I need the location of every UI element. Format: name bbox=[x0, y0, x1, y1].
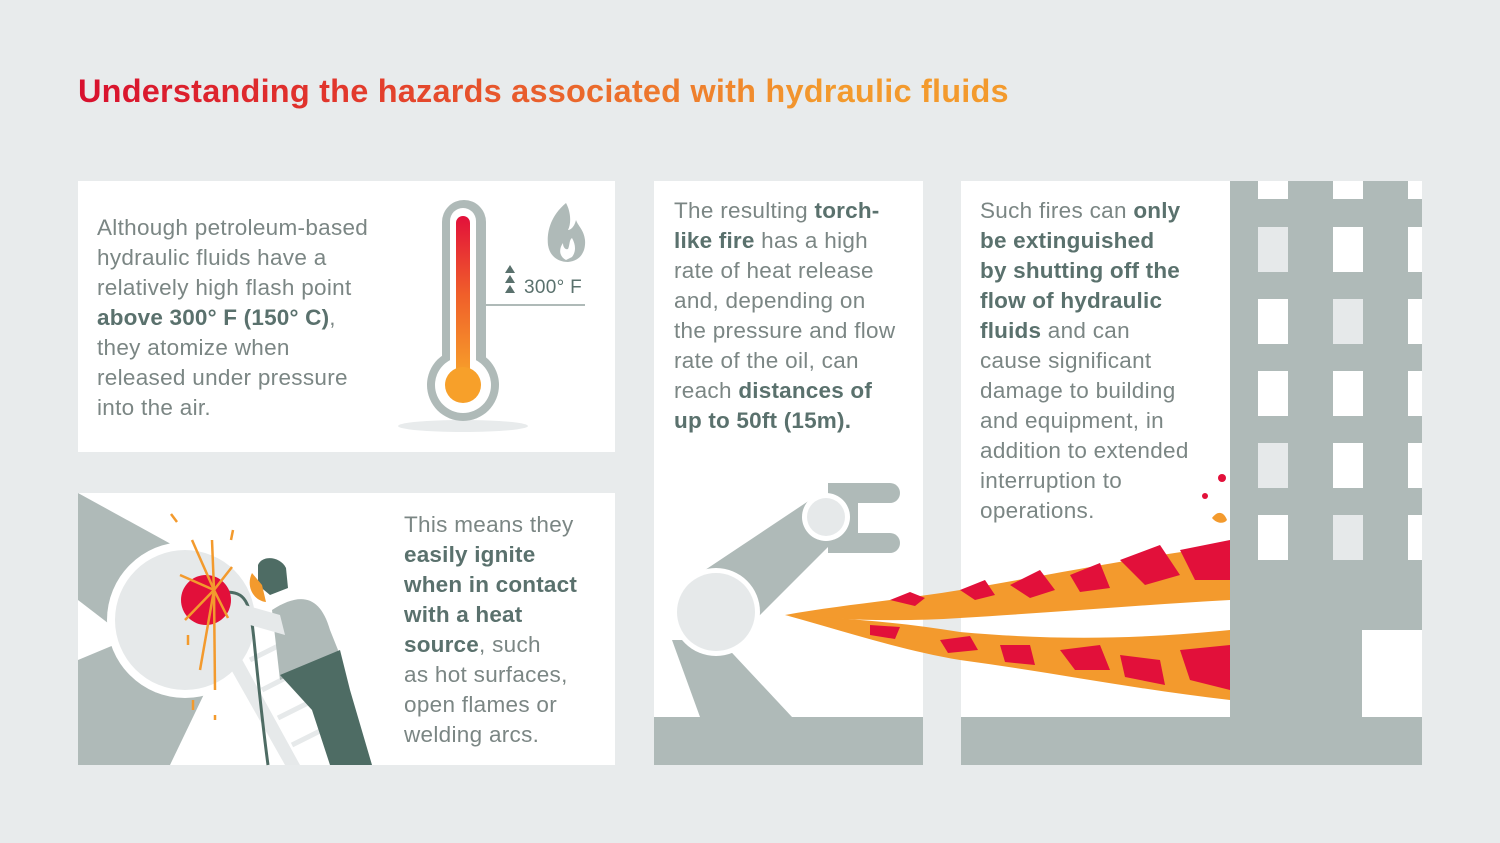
text: flash point: into the air. bbox=[97, 395, 211, 420]
text: ignite: This means they bbox=[404, 512, 574, 537]
text: extinguish: by shutting off the bbox=[980, 258, 1180, 283]
text: ignite: welding arcs. bbox=[404, 722, 539, 747]
panel: torch fire bbox=[654, 181, 923, 765]
text: extinguish: operations. bbox=[980, 498, 1095, 523]
text: ignite: as hot surfaces, bbox=[404, 662, 568, 687]
text: flash point: hydraulic fluids have a bbox=[97, 245, 327, 270]
text: ignite: easily ignite bbox=[404, 542, 535, 567]
text: torch fire: rate of heat release bbox=[674, 258, 874, 283]
text: torch fire: rate of the oil, can bbox=[674, 348, 859, 373]
text: torch fire bbox=[674, 198, 896, 433]
illustration: welder bbox=[78, 493, 372, 765]
icon: up arrows bbox=[505, 265, 515, 293]
text: torch fire: and, depending on bbox=[674, 288, 866, 313]
label: 300° F: 300° F bbox=[524, 277, 582, 298]
text: flash point: above 300° F (150° C), bbox=[97, 305, 336, 330]
text: extinguish bbox=[980, 198, 1189, 523]
title: Understanding the hazards associated with hydraulic fluids bbox=[78, 73, 1009, 109]
panel: welder bbox=[78, 493, 615, 765]
text: flash point: released under pressure bbox=[97, 365, 348, 390]
text: torch fire: like fire has a high bbox=[674, 228, 868, 253]
text: extinguish: cause significant bbox=[980, 348, 1151, 373]
text: torch fire: up to 50ft (15m). bbox=[674, 408, 851, 433]
icon: thermometer bbox=[398, 200, 585, 432]
text: torch fire: The resulting torch- bbox=[674, 198, 879, 223]
text: extinguish: fluids and can bbox=[980, 318, 1130, 343]
illustration: building bbox=[961, 181, 1422, 765]
text: ignite: source, such bbox=[404, 632, 541, 657]
text: flash point bbox=[97, 215, 368, 420]
text: extinguish: flow of hydraulic bbox=[980, 288, 1162, 313]
icon: flame bbox=[548, 203, 585, 262]
text: ignite: open flames or bbox=[404, 692, 557, 717]
illustration: flame jet bbox=[785, 474, 1230, 700]
panel: flash point bbox=[78, 181, 615, 452]
text: flash point: relatively high flash point bbox=[97, 275, 352, 300]
illustration: robot arm bbox=[654, 483, 923, 765]
panel: building bbox=[961, 181, 1422, 765]
text: torch fire: reach distances of bbox=[674, 378, 872, 403]
text: extinguish: be extinguished bbox=[980, 228, 1154, 253]
text: extinguish: interruption to bbox=[980, 468, 1122, 493]
text: extinguish: and equipment, in bbox=[980, 408, 1164, 433]
text: torch fire: the pressure and flow bbox=[674, 318, 895, 343]
text: flash point: Although petroleum-based bbox=[97, 215, 368, 240]
text: flash point: they atomize when bbox=[97, 335, 290, 360]
text: extinguish: addition to extended bbox=[980, 438, 1189, 463]
text: extinguish: Such fires can only bbox=[980, 198, 1180, 223]
text: ignite: when in contact bbox=[404, 572, 577, 597]
text: extinguish: damage to building bbox=[980, 378, 1176, 403]
text: ignite bbox=[404, 512, 577, 747]
text: ignite: with a heat bbox=[404, 602, 522, 627]
